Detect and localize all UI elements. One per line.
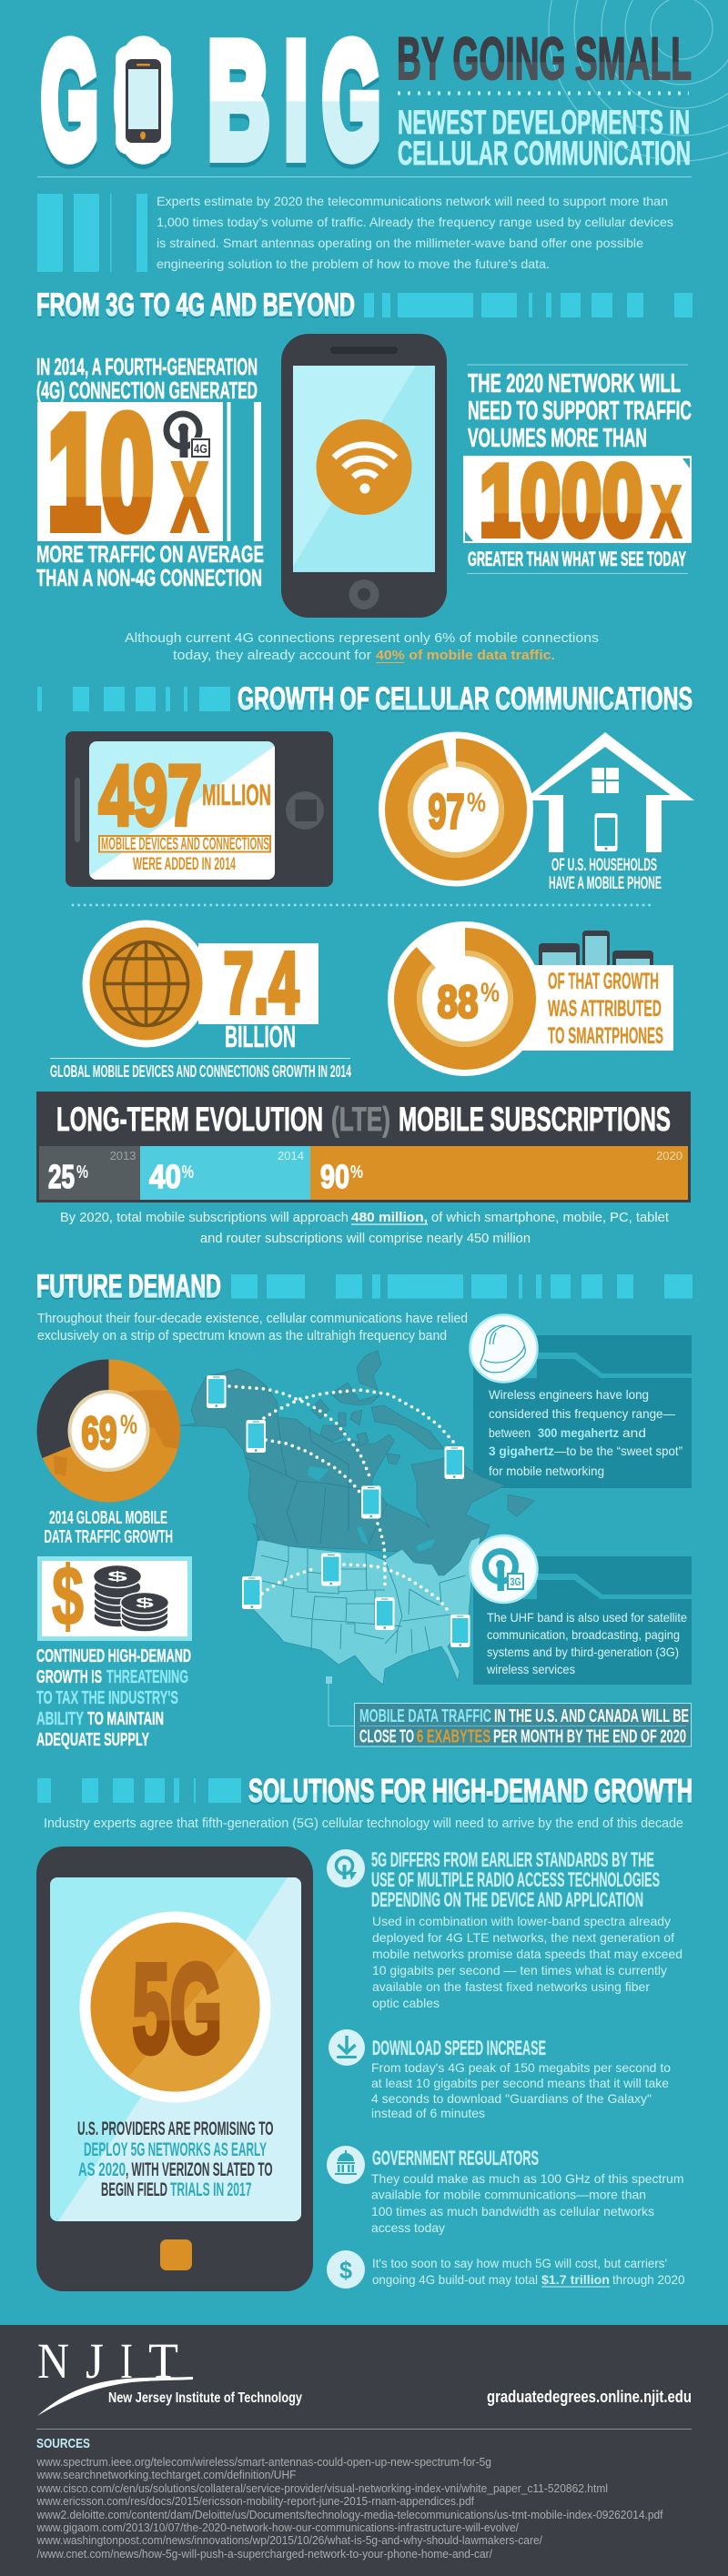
text: industry experts: Industry experts agree that fifth-generation (5G) cellular technology will need to arrive by the end of this decade: [44, 1816, 683, 1831]
chart: 69 percent donut: 2014 GLOBAL MOBILE: [49, 1508, 167, 1528]
block: cost: ongoing 4G build-out may total: [372, 2272, 538, 2287]
panel: uhf band: wireless services: [486, 1662, 575, 1676]
bar chart: 2013: [110, 1149, 136, 1162]
panel: tablet 497 million: 497: [98, 748, 202, 842]
block: government regulators: They could make as much as 100 GHz of this spectrum: [371, 2171, 684, 2186]
panel: 7.4 billion: [50, 921, 351, 1081]
panel: 97 percent donut and house: 97: [428, 784, 464, 839]
heading: growth: [37, 681, 693, 717]
block: download speed: DOWNLOAD SPEED INCREASE: [372, 2037, 546, 2059]
panel: wireless engineers: and: [622, 1425, 646, 1440]
title: go big: B: [207, 10, 269, 190]
united states: [242, 1537, 480, 1685]
logo: njit: [37, 2333, 302, 2416]
footer: [0, 2325, 728, 2576]
panel: 88 percent donut: %: [480, 978, 500, 1008]
text: 4g share: Although current 4G connections represent only 6% of mobile connections: [125, 630, 599, 646]
block: government regulators: available for mobile communications—more than: [371, 2187, 646, 2201]
text: us providers: DEPLOY 5G NETWORKS AS EARLY: [84, 2139, 267, 2160]
dotted divider: [398, 91, 689, 95]
heading: future demand: [36, 1269, 693, 1304]
intro block: engineering solution to the problem of how to move the future’s data.: [157, 257, 550, 271]
sources: www.gigaom.com/2013/10/07/the-2020-network-how-our-communications-infrastructure-will-evolve/: [36, 2521, 519, 2534]
bar chart: 90: [320, 1158, 349, 1195]
panel: 5g phone: [36, 1846, 313, 2291]
dotted connections: [229, 1386, 453, 1610]
sources: [36, 2436, 663, 2561]
intro block: [37, 194, 673, 272]
panel: 7.4 billion: GLOBAL MOBILE DEVICES AND CONNECTIONS GROWTH IN 2014: [50, 1062, 351, 1081]
icon: dollar circle: $: [339, 2257, 352, 2284]
icon: globe: [104, 942, 187, 1026]
block: cost: [327, 2250, 685, 2289]
block: cost: $1.7 trillion: [541, 2272, 610, 2287]
lakes: [308, 1466, 436, 1552]
panel: 7.4 billion: 7.4: [224, 935, 298, 1031]
decorative signal rings: [549, 0, 728, 161]
text: us providers: , WITH VERIZON SLATED TO: [126, 2159, 273, 2180]
panel: uhf band: communication, broadcasting, paging: [487, 1627, 680, 1642]
subtitle: [398, 104, 691, 172]
panel: tablet 497 million: [66, 731, 333, 887]
panel: 88 percent donut: [388, 921, 673, 1076]
heading: from 3g to 4g: FROM 3G TO 4G AND BEYOND: [36, 287, 355, 323]
intro block: 1,000 times today’s volume of traffic. Already the frequency range used by cellular devices: [157, 215, 673, 229]
block: 5g differs: optic cables: [372, 1996, 440, 2010]
panel: wireless engineers: considered this frequency range—: [489, 1406, 675, 1421]
block: government regulators: access today: [371, 2220, 445, 2235]
sources: www.searchnetworking.techtarget.com/definition/UHF: [36, 2468, 297, 2481]
text: continued high demand: ADEQUATE SUPPLY: [36, 1730, 149, 1750]
icon: 4g signal: [167, 414, 211, 458]
chart: 69 percent donut: DATA TRAFFIC GROWTH: [44, 1527, 173, 1547]
panel: 10x: IN 2014, A FOURTH-GENERATION: [36, 353, 258, 380]
panel: 10x: MORE TRAFFIC ON AVERAGE: [36, 540, 264, 568]
block: government regulators: 100 times as much bandwidth as cellular networks: [371, 2204, 654, 2219]
title: go big: [41, 10, 380, 190]
block: 5g differs: deployed for 4G LTE networks, the next generation of: [372, 1930, 674, 1945]
intro block: Experts estimate by 2020 the telecommunications network will need to support more than: [157, 194, 668, 208]
block: 5g differs: Used in combination with lower-band spectra already: [372, 1914, 671, 1928]
block: download speed: 4 seconds to download "Guardians of the Galaxy": [371, 2091, 652, 2106]
panel: lte subscriptions: [36, 1092, 691, 1202]
block: download speed: From today's 4G peak of 150 megabits per second to: [371, 2060, 671, 2075]
panel: uhf band: [473, 1556, 692, 1685]
panel: tablet 497 million: MILLION: [202, 779, 271, 811]
title: go big: O: [114, 10, 173, 190]
panel: wireless engineers: [473, 1335, 692, 1488]
block: 5g differs: available on the fastest fixed networks using fiber: [372, 1979, 650, 1994]
bar chart: %: [76, 1162, 88, 1182]
chart: 69 percent donut: [37, 1359, 182, 1547]
panel: tablet 497 million: MOBILE DEVICES AND CONNECTIONS: [101, 835, 269, 854]
text: lte note: and router subscriptions will comprise nearly 450 million: [200, 1232, 531, 1246]
panel: 10x: [36, 353, 264, 591]
panel: 10x: x: [170, 412, 209, 560]
text: continued high demand: [36, 1646, 191, 1750]
bar chart: %: [182, 1162, 194, 1182]
sources: www.ericsson.com/res/docs/2015/ericsson-mobility-report-june-2015-rnam-appendices.pdf: [36, 2494, 474, 2508]
panel: wireless engineers: Wireless engineers have long: [489, 1387, 649, 1402]
icon: capitol: [327, 2146, 365, 2184]
text: lte note: 480 million,: [351, 1211, 428, 1225]
panel: uhf band: The UHF band is also used for satellite: [487, 1610, 687, 1625]
text: future demand intro: [37, 1312, 468, 1343]
logo: njit: N: [37, 2333, 69, 2389]
bar chart: 2020: [656, 1149, 682, 1162]
text: 4g share: 40% of mobile data traffic.: [376, 648, 555, 663]
callout: mobile data traffic: CLOSE TO: [359, 1726, 414, 1746]
panel: lte subscriptions: (LTE): [331, 1101, 390, 1138]
intro block: is strained. Smart antennas operating on the millimeter-wave band offer one possible: [157, 236, 643, 250]
panel: wireless engineers: 300 megahertz: [538, 1425, 619, 1440]
panel: 1000x: x: [650, 448, 682, 558]
panel: money icon box: [37, 1550, 192, 1643]
text: us providers: AS 2020: [78, 2159, 126, 2180]
callout: mobile data traffic: [326, 1676, 692, 1746]
url: graduatedegrees.online.njit.edu: [487, 2388, 692, 2406]
icon: helmet: [470, 1315, 537, 1383]
panel: uhf band: systems and by third-generation (3G): [487, 1645, 679, 1659]
bar chart: 25: [48, 1158, 75, 1195]
heading: future demand: FUTURE DEMAND: [36, 1269, 221, 1304]
panel: 97 percent donut and house: %: [467, 788, 486, 818]
block: government regulators: [327, 2146, 684, 2235]
icon: large phone with wifi: [281, 334, 447, 618]
text: continued high demand: GROWTH IS: [36, 1667, 102, 1687]
panel: 1000x: [463, 365, 692, 573]
text: lte note: of which smartphone, mobile, PC, tablet: [431, 1211, 669, 1225]
panel: tablet 497 million: WERE ADDED IN 2014: [133, 855, 236, 874]
panel: wireless engineers: —to be the “sweet spot”: [554, 1444, 682, 1458]
panel: 10x: (4G) CONNECTION GENERATED: [36, 377, 258, 404]
chart: 69 percent donut: 69: [82, 1408, 116, 1459]
panel: 88 percent donut: 88: [437, 977, 479, 1028]
text: 4g share: today, they already account for: [173, 648, 371, 663]
text: continued high demand: ABILITY: [36, 1709, 84, 1729]
text: us providers: BEGIN FIELD: [101, 2179, 167, 2200]
icon: dollar circle: [327, 2250, 365, 2289]
text: continued high demand: TO TAX THE INDUSTRY'S: [36, 1688, 178, 1708]
text: us providers: TRIALS IN 2017: [170, 2179, 251, 2200]
bar chart: 40: [149, 1158, 181, 1195]
map: north america: [179, 1351, 534, 1685]
icon: 4g signal: 4G: [194, 441, 207, 456]
icon: signal: [327, 1849, 365, 1887]
block: 5g differs: 10 gigabits per second — ten times what is currently: [372, 1963, 667, 1977]
block: government regulators: GOVERNMENT REGULATORS: [372, 2147, 539, 2169]
block: 5g differs: [327, 1848, 682, 2010]
block: 5g differs: mobile networks promise data speeds that may exceed: [372, 1947, 682, 1961]
bar chart: %: [350, 1162, 363, 1182]
text: lte note: By 2020, total mobile subscriptions will approach: [60, 1211, 349, 1225]
panel: 7.4 billion: BILLION: [225, 1020, 296, 1053]
text: future demand intro: exclusively on a strip of spectrum known as the ultrahigh frequency band: [37, 1329, 447, 1343]
sources: www.washingtonpost.com/news/innovations/wp/2015/10/26/what-is-5g-and-why-should-lawmakers-care/: [36, 2533, 542, 2547]
text: continued high demand: CONTINUED HIGH-DEMAND: [36, 1646, 191, 1666]
block: cost: through 2020: [612, 2272, 685, 2287]
heading: solutions: [37, 1772, 693, 1809]
logo: njit: T: [148, 2333, 178, 2389]
panel: money icon box: $: [136, 1595, 156, 1611]
text: continued high demand: TO MAINTAIN: [87, 1709, 164, 1729]
block: cost: It's too soon to say how much 5G will cost, but carriers': [372, 2256, 667, 2270]
panel: 5g phone: 5G: [133, 1939, 222, 2079]
panel: wireless engineers: for mobile networking: [489, 1464, 604, 1478]
icon: 3g signal: 3G: [510, 1575, 521, 1588]
icon: dollar: $: [52, 1550, 84, 1643]
icon: download: [329, 2029, 365, 2066]
text: continued high demand: THREATENING: [106, 1667, 188, 1687]
heading: lte: LONG-TERM EVOLUTION: [56, 1101, 323, 1138]
text: us providers: [77, 2118, 273, 2200]
logo: njit: New Jersey Institute of Technology: [108, 2390, 302, 2406]
panel: 10x: THAN A NON-4G CONNECTION: [36, 564, 262, 591]
sources: SOURCES: [36, 2436, 90, 2451]
panel: 97 percent donut and house: [379, 731, 694, 893]
panel: wireless engineers: 3 gigahertz: [489, 1444, 554, 1458]
text: future demand intro: Throughout their four-decade existence, cellular communications have relied: [37, 1312, 468, 1326]
bar chart: 2014: [278, 1149, 304, 1162]
chart: 69 percent donut: %: [120, 1410, 137, 1440]
sources: www.spectrum.ieee.org/telecom/wireless/smart-antennas-could-open-up-new-spectrum-for-5g: [36, 2455, 491, 2469]
icon: smartphones: [539, 931, 653, 971]
block: download speed: [329, 2029, 671, 2120]
bar chart: [39, 1146, 688, 1200]
text: lte note: [60, 1211, 669, 1246]
callout: mobile data traffic: MOBILE DATA TRAFFIC: [359, 1706, 491, 1726]
state lines: [261, 1546, 466, 1654]
logo: njit: J: [86, 2333, 104, 2389]
canada and alaska: [179, 1351, 534, 1578]
panel: 10x: 10: [47, 382, 154, 562]
title: go big: I: [285, 10, 308, 190]
sources: www2.deloitte.com/content/dam/Deloitte/us/Documents/technology-media-telecommunications/us-tmt-mobile-index-09262014.pdf: [36, 2508, 663, 2521]
icon: coins: [93, 1565, 169, 1632]
icons: phones on map: [207, 1375, 470, 1647]
panel: 1000x: 1000: [479, 444, 642, 557]
province lines: [246, 1417, 387, 1544]
icon: house: [523, 732, 694, 852]
sources: www.cisco.com/c/en/us/solutions/collateral/service-provider/visual-networking-index-vni/white_paper_c11-520862.html: [36, 2481, 608, 2495]
panel: wireless engineers: between: [489, 1425, 531, 1440]
text: 4g share: [125, 630, 599, 663]
sources: /www.cnet.com/news/how-5g-will-push-a-supercharged-network-to-your-phone-home-and-car/: [36, 2547, 492, 2561]
panel: money icon box: $: [107, 1569, 129, 1585]
text: us providers: U.S. PROVIDERS ARE PROMISING TO: [77, 2118, 273, 2139]
block: download speed: instead of 6 minutes: [371, 2106, 485, 2120]
block: download speed: at least 10 gigabits per second means that it will take: [371, 2076, 669, 2090]
callout: mobile data traffic: 6 EXABYTES: [417, 1726, 490, 1746]
icon: phone in the letter O: [126, 59, 161, 143]
logo: njit: I: [120, 2333, 133, 2389]
icon: 3g signal: [470, 1535, 537, 1603]
text: G: [322, 10, 380, 190]
title: go big: G: [41, 10, 98, 190]
